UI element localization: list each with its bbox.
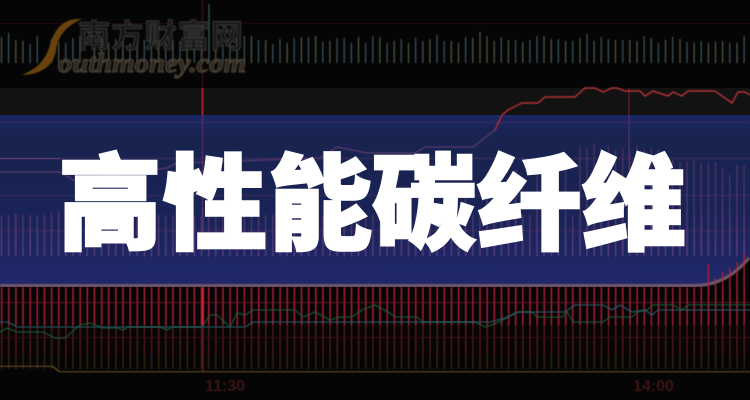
banner lower highlight edge [0, 258, 749, 286]
title: 高性能碳纤维 [58, 148, 686, 264]
green indicator line [0, 305, 750, 338]
blue title banner [0, 115, 750, 287]
price bars in banner [1, 143, 750, 251]
watermark URL: outhmoney.com [58, 48, 246, 78]
watermark Chinese name: 南方财富网 [78, 18, 243, 54]
time label 14:00: 14:00 [633, 378, 674, 395]
blue indicator line [0, 305, 750, 327]
yellow baseline [0, 366, 750, 372]
cursor line upper panel [202, 88, 204, 115]
time label 11:30: 11:30 [205, 378, 245, 395]
logo swoosh letter S [22, 19, 82, 75]
lower price bars [0, 254, 750, 372]
watermark: Southmoney logo [22, 18, 246, 78]
volume bars [2, 4, 744, 63]
price line in banner [0, 130, 495, 180]
red price line top right [495, 88, 750, 130]
